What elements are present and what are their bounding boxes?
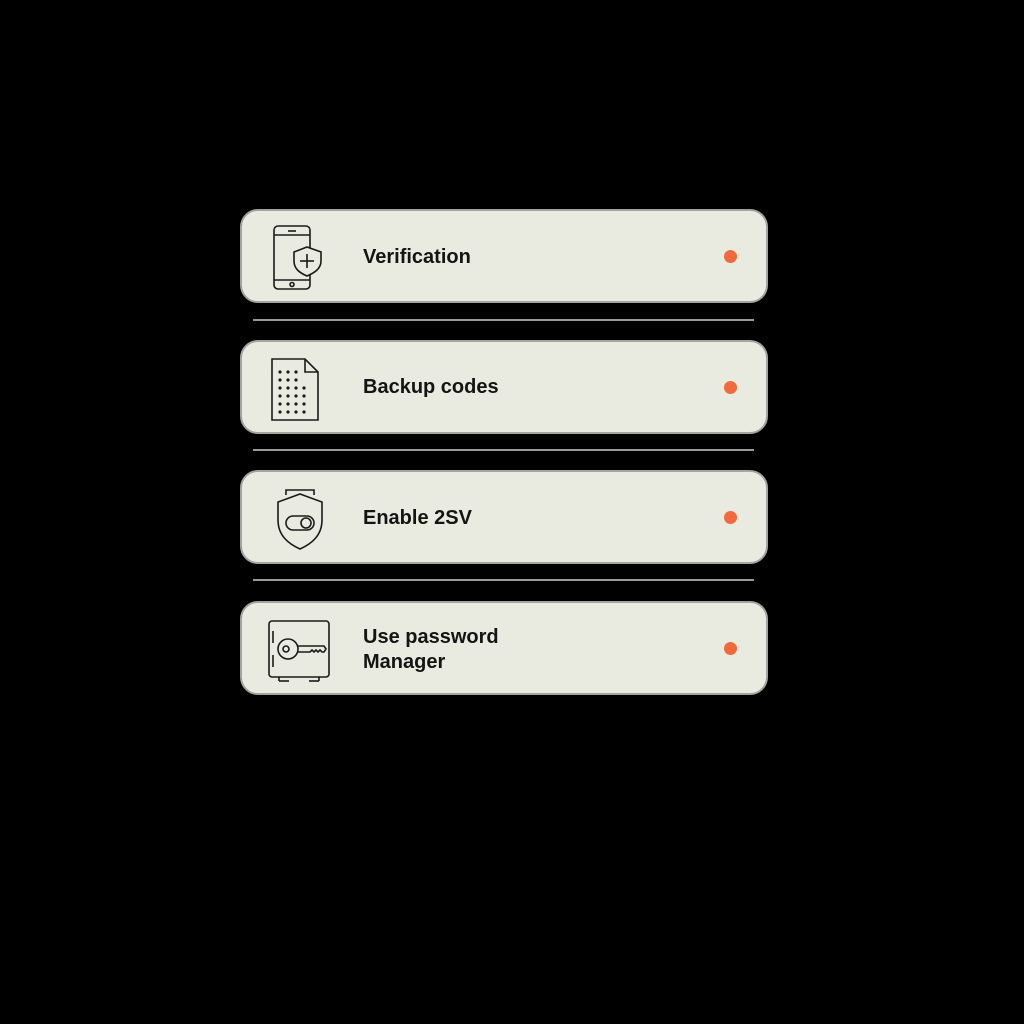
label: Backup codes [363,376,499,398]
card: Backup codes [240,340,768,434]
label [363,626,499,673]
card: Use password Manager [240,601,768,695]
status dot [724,381,737,394]
card: Enable 2SV [240,470,768,564]
status dot [724,250,737,263]
label: Enable 2SV [363,507,472,529]
icon: shield with toggle [277,489,323,550]
status dot [724,511,737,524]
label: Manager [363,651,445,673]
icon: safe with key [268,620,330,682]
status dot [724,642,737,655]
label: Use password [363,626,499,648]
icon: phone with shield [273,225,322,290]
label: Verification [363,246,471,268]
card: Verification [240,209,768,303]
icon: document with dots [271,358,319,421]
